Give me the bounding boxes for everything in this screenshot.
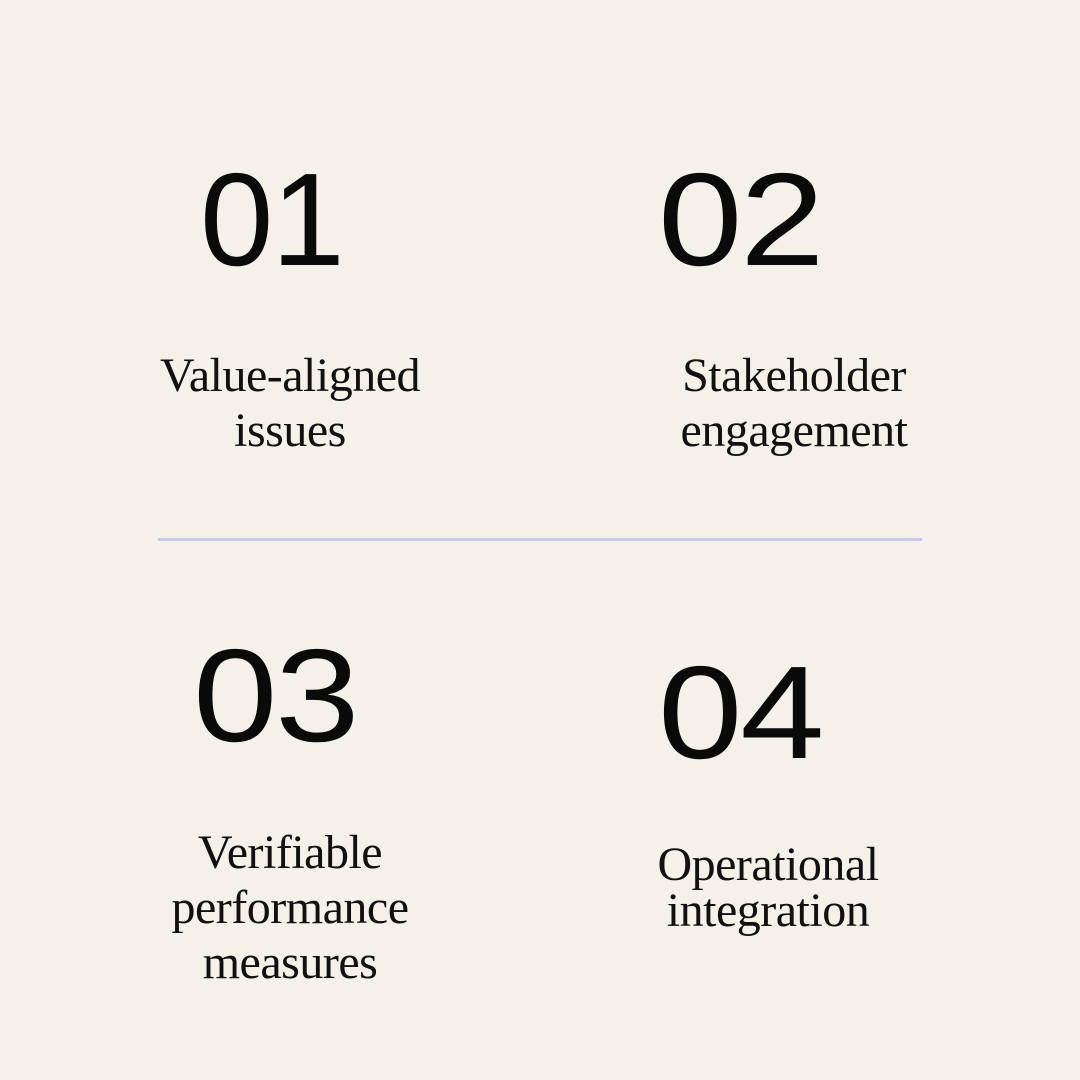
- label: Stakeholder engagement: Stakeholder: [682, 349, 906, 402]
- number 01: 01: [200, 146, 343, 293]
- label: Verifiable performance measures: Verifiable: [198, 826, 382, 879]
- label: Verifiable performance measures: performance: [171, 881, 408, 934]
- label: Value-aligned issues: Value-aligned: [160, 349, 420, 402]
- label: Operational integration: [657, 838, 879, 937]
- label: Stakeholder engagement: engagement: [681, 404, 907, 457]
- label: Verifiable performance measures: [171, 826, 408, 989]
- label: Value-aligned issues: [160, 349, 420, 457]
- label: Operational integration: integration: [667, 884, 869, 937]
- label: Verifiable performance measures: measures: [203, 936, 377, 989]
- label: Value-aligned issues: issues: [234, 404, 346, 457]
- number 03: 03: [193, 622, 357, 769]
- number 02: 02: [658, 146, 822, 293]
- label: Operational integration: Operational: [657, 838, 879, 891]
- number 04: 04: [658, 639, 822, 786]
- label: Stakeholder engagement: [681, 349, 908, 457]
